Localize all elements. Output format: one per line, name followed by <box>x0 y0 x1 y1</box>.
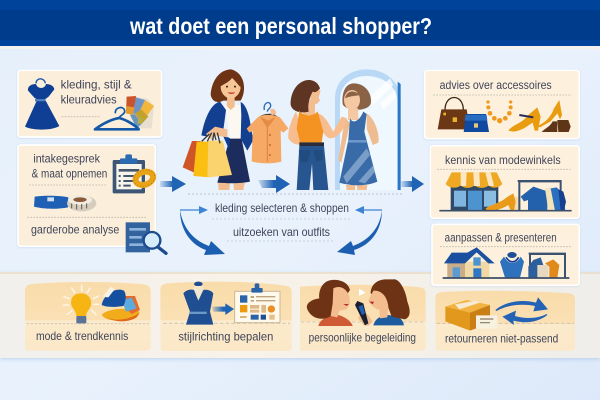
icon: clipboard <box>113 154 145 193</box>
bottom strip <box>0 272 600 358</box>
figure: orange blouse on hanger <box>247 103 288 163</box>
icon: hanger <box>95 108 139 129</box>
text: kennis van modewinkels: kennis van modewinkels <box>445 154 561 167</box>
panel: aanpassen & presenteren <box>432 224 579 285</box>
text: kleding selecteren & shoppen: kleding selecteren & shoppen <box>215 201 349 215</box>
panel: advies over accessoires <box>425 70 579 139</box>
icon: moodboard <box>235 283 280 323</box>
icon: blue tape roll <box>34 195 96 211</box>
icon: clothes rack <box>518 181 566 211</box>
figure: reflection in mirror <box>338 83 379 190</box>
icon: return arrows <box>495 297 548 325</box>
figure: client seen from behind <box>288 80 347 190</box>
tile: stijlrichting bepalen <box>160 282 292 351</box>
icon: brown shoes <box>542 120 571 132</box>
text: & maat opnemen: & maat opnemen <box>32 168 107 181</box>
icon: colour swatches <box>126 96 154 128</box>
mirror <box>335 69 401 190</box>
icon: hand with microphone <box>355 301 373 326</box>
tile: retourneren niet-passend <box>435 291 575 351</box>
text: stijlrichting bepalen: stijlrichting bepalen <box>178 331 273 344</box>
curved arrows right <box>337 206 382 255</box>
curved arrows left <box>180 206 225 255</box>
dashed divider <box>188 193 403 195</box>
icon: parcel <box>445 300 497 331</box>
arrow: shopper to client <box>258 175 290 193</box>
icon: document with magnifier <box>126 222 166 253</box>
icon: orange shoe <box>486 193 521 211</box>
icon: hats and fabrics <box>102 287 140 321</box>
figure: personal shopper with bags <box>183 69 253 190</box>
icon: light bulb <box>63 285 99 323</box>
panel: kennis van modewinkels <box>430 146 579 218</box>
panel: intakegesprek, maat opnemen, garderobe analyse <box>18 145 166 253</box>
text: garderobe analyse: garderobe analyse <box>31 223 119 236</box>
text: uitzoeken van outfits: uitzoeken van outfits <box>233 225 330 239</box>
title: wat doet een personal shopper? <box>129 13 432 39</box>
central illustration <box>183 69 401 190</box>
text: kleding, stijl & kleuradvies: kleding, stijl & <box>61 78 132 91</box>
header banner <box>0 0 600 49</box>
text: kleding, stijl & kleuradvies: kleuradvies <box>61 93 117 106</box>
arrow: to moodboard <box>212 303 234 315</box>
text: aanpassen & presenteren: aanpassen & presenteren <box>445 232 557 245</box>
icon: brown handbag <box>438 97 470 129</box>
tile: persoonlijke begeleiding <box>300 279 426 351</box>
icon: orange heels <box>508 100 562 132</box>
figure: woman right <box>368 279 410 325</box>
icon: shop front <box>446 172 502 210</box>
text: advies over accessoires: advies over accessoires <box>440 79 552 92</box>
icon: blue handbag <box>464 114 489 132</box>
text: mode & trendkennis: mode & trendkennis <box>36 330 128 343</box>
icon: house <box>444 247 495 278</box>
icon: mannequin <box>183 282 213 325</box>
arrow: mirror to right panels <box>401 176 424 192</box>
text: intakegesprek: intakegesprek <box>33 153 100 166</box>
icon: dress on mannequin <box>500 252 524 278</box>
tile: mode & trendkennis <box>25 282 151 351</box>
icon: necklace <box>486 100 513 123</box>
text: persoonlijke begeleiding: persoonlijke begeleiding <box>309 332 416 345</box>
icon: speech bubble <box>359 289 366 296</box>
icon: dress <box>25 79 59 130</box>
text: kleding, stijl & kleuradvies <box>61 78 132 106</box>
panel: kleding, stijl & kleuradvies <box>18 70 162 137</box>
text: retourneren niet-passend: retourneren niet-passend <box>445 332 558 345</box>
icon: measuring tape ring <box>132 167 157 189</box>
arrow: into shopper <box>160 176 186 192</box>
figure: woman left <box>307 280 353 326</box>
icon: clothes rack <box>528 254 566 278</box>
